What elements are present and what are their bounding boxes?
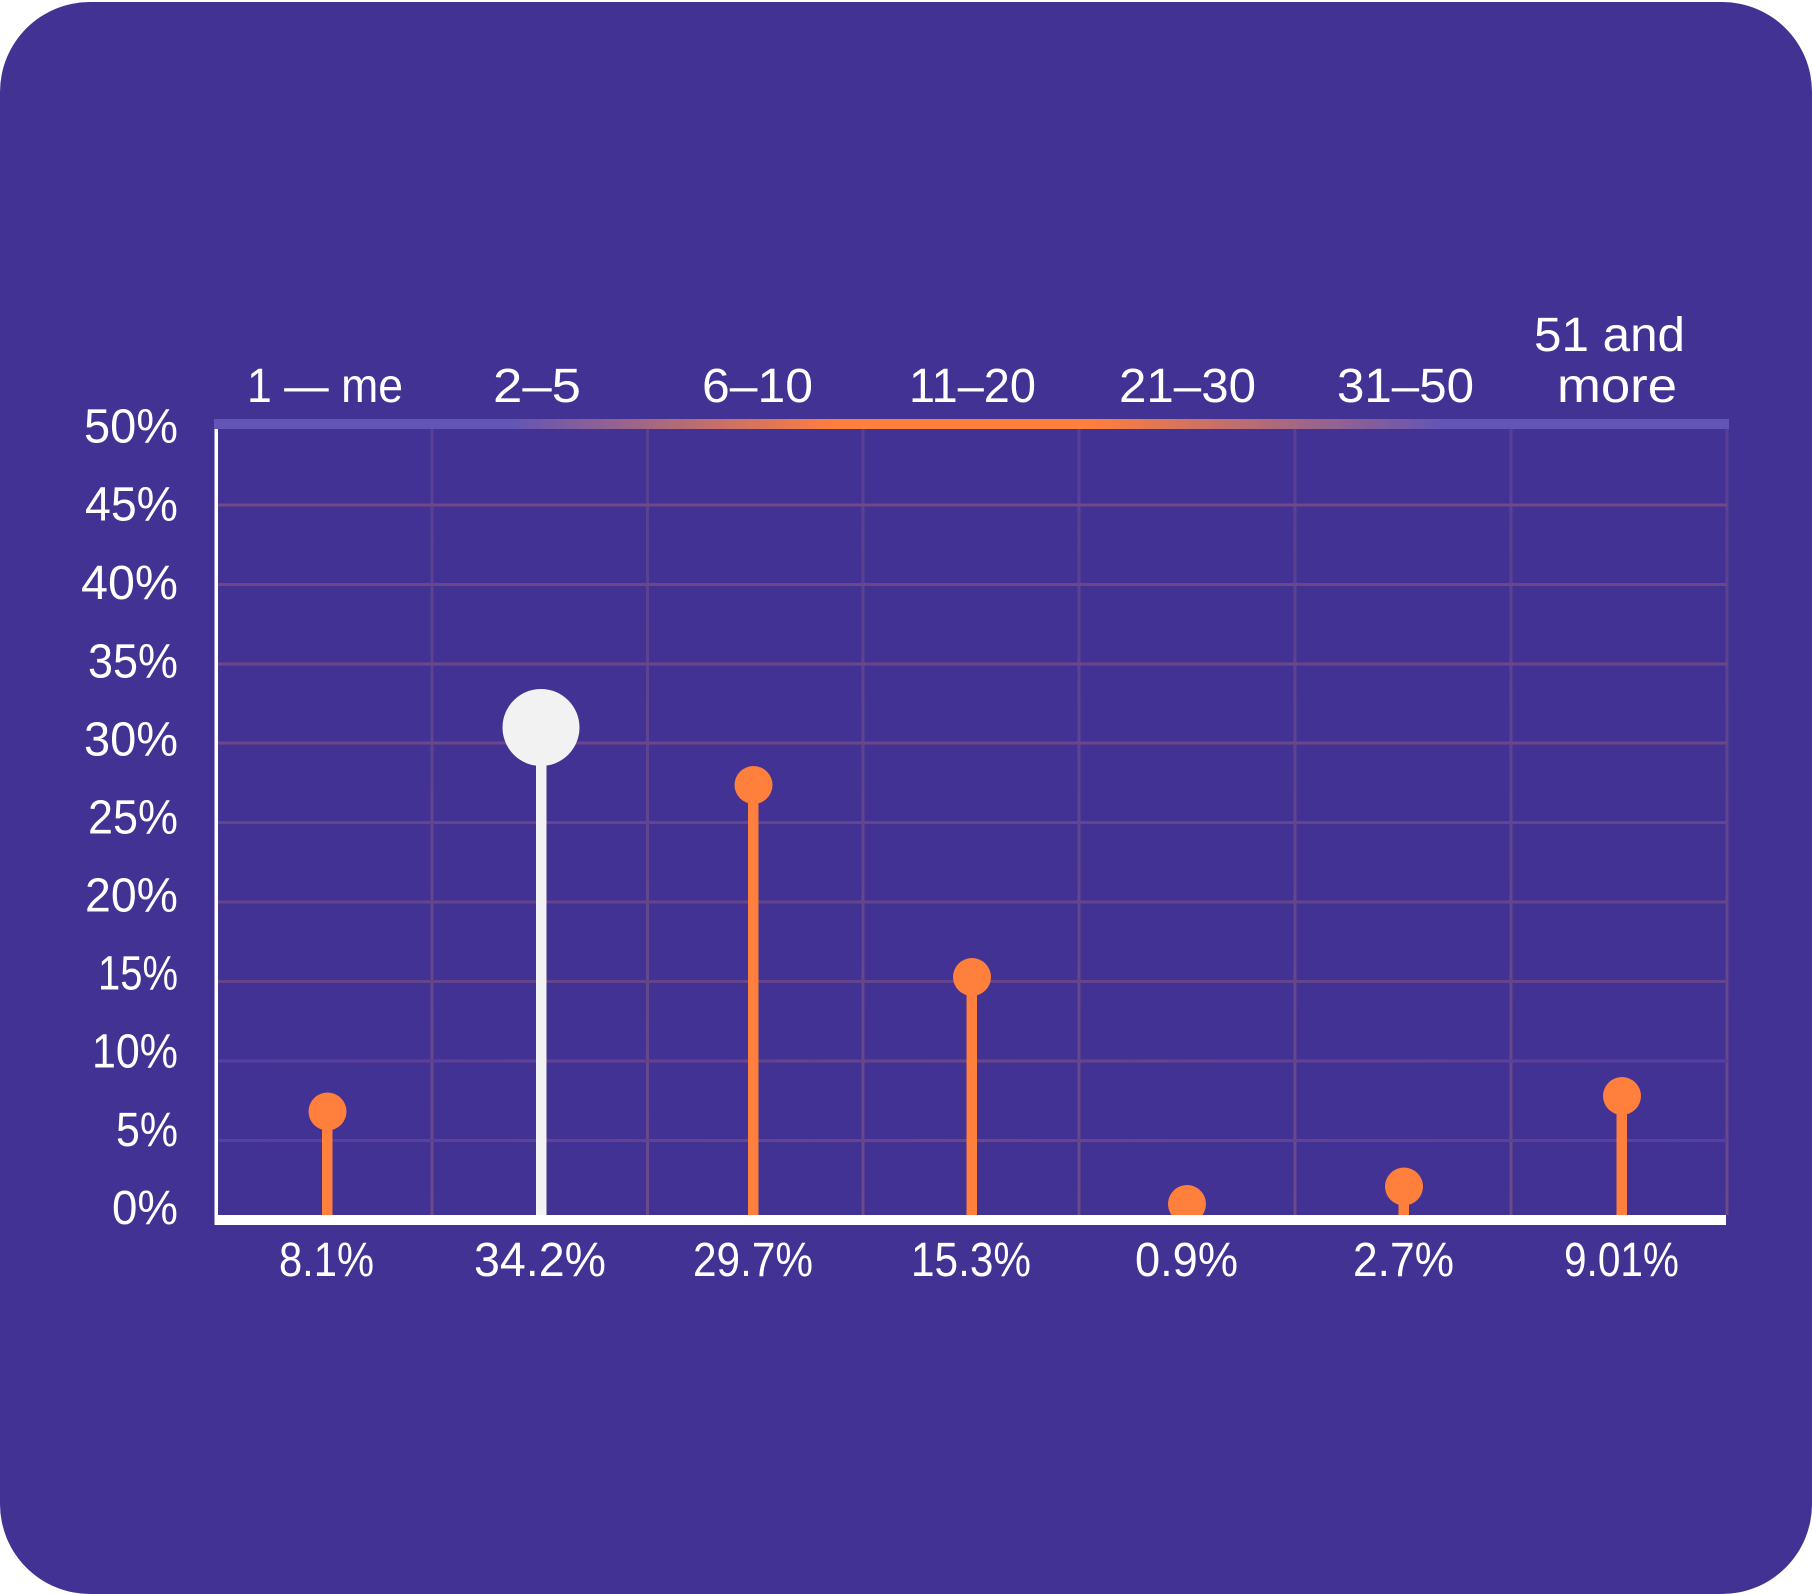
lollipop: 1 — me 8.1% — [308, 1092, 346, 1215]
lollipop: 21–30 0.9% — [1168, 1185, 1206, 1215]
category labels: 51 and — [1534, 309, 1685, 362]
category labels — [247, 309, 1685, 413]
y axis labels: 5% — [116, 1104, 178, 1157]
value labels: 2.7% — [1353, 1234, 1454, 1287]
y axis labels: 25% — [88, 792, 178, 844]
y axis labels — [81, 400, 178, 1235]
y axis labels: 20% — [85, 870, 178, 922]
category labels: 21–30 — [1119, 360, 1256, 413]
y axis labels: 35% — [88, 636, 178, 688]
lollipop: 2–5 34.2% (highlighted) — [502, 689, 580, 1215]
value labels: 9.01% — [1564, 1234, 1679, 1287]
category labels: 2–5 — [493, 360, 581, 413]
category labels: 1 — me — [247, 360, 403, 413]
category labels: more — [1557, 360, 1677, 413]
y axis labels: 45% — [85, 478, 178, 532]
category labels: 6–10 — [702, 360, 813, 413]
lollipop: 51 and more 9.01% — [1603, 1077, 1641, 1215]
value labels — [279, 1234, 1679, 1287]
value labels: 34.2% — [474, 1234, 606, 1287]
category labels: 11–20 — [909, 360, 1036, 413]
x axis line — [214, 1215, 1726, 1225]
value labels: 0.9% — [1135, 1234, 1238, 1287]
y axis labels: 30% — [84, 714, 178, 766]
y axis labels: 0% — [112, 1182, 178, 1235]
y axis labels: 15% — [98, 948, 178, 1000]
lollipop: 11–20 15.3% — [953, 958, 991, 1215]
y axis labels: 40% — [81, 557, 178, 610]
lollipop: 6–10 29.7% — [734, 766, 772, 1215]
category labels: 31–50 — [1337, 360, 1474, 413]
y axis line — [214, 429, 218, 1219]
y axis labels: 10% — [92, 1026, 178, 1078]
grid lines — [218, 429, 1727, 1215]
value labels: 15.3% — [911, 1234, 1031, 1287]
chart — [81, 309, 1729, 1287]
value labels: 8.1% — [279, 1234, 374, 1287]
y axis labels: 50% — [84, 400, 178, 454]
lollipop: 31–50 2.7% — [1385, 1168, 1423, 1215]
value labels: 29.7% — [693, 1234, 813, 1287]
top gradient bar — [214, 419, 1729, 429]
